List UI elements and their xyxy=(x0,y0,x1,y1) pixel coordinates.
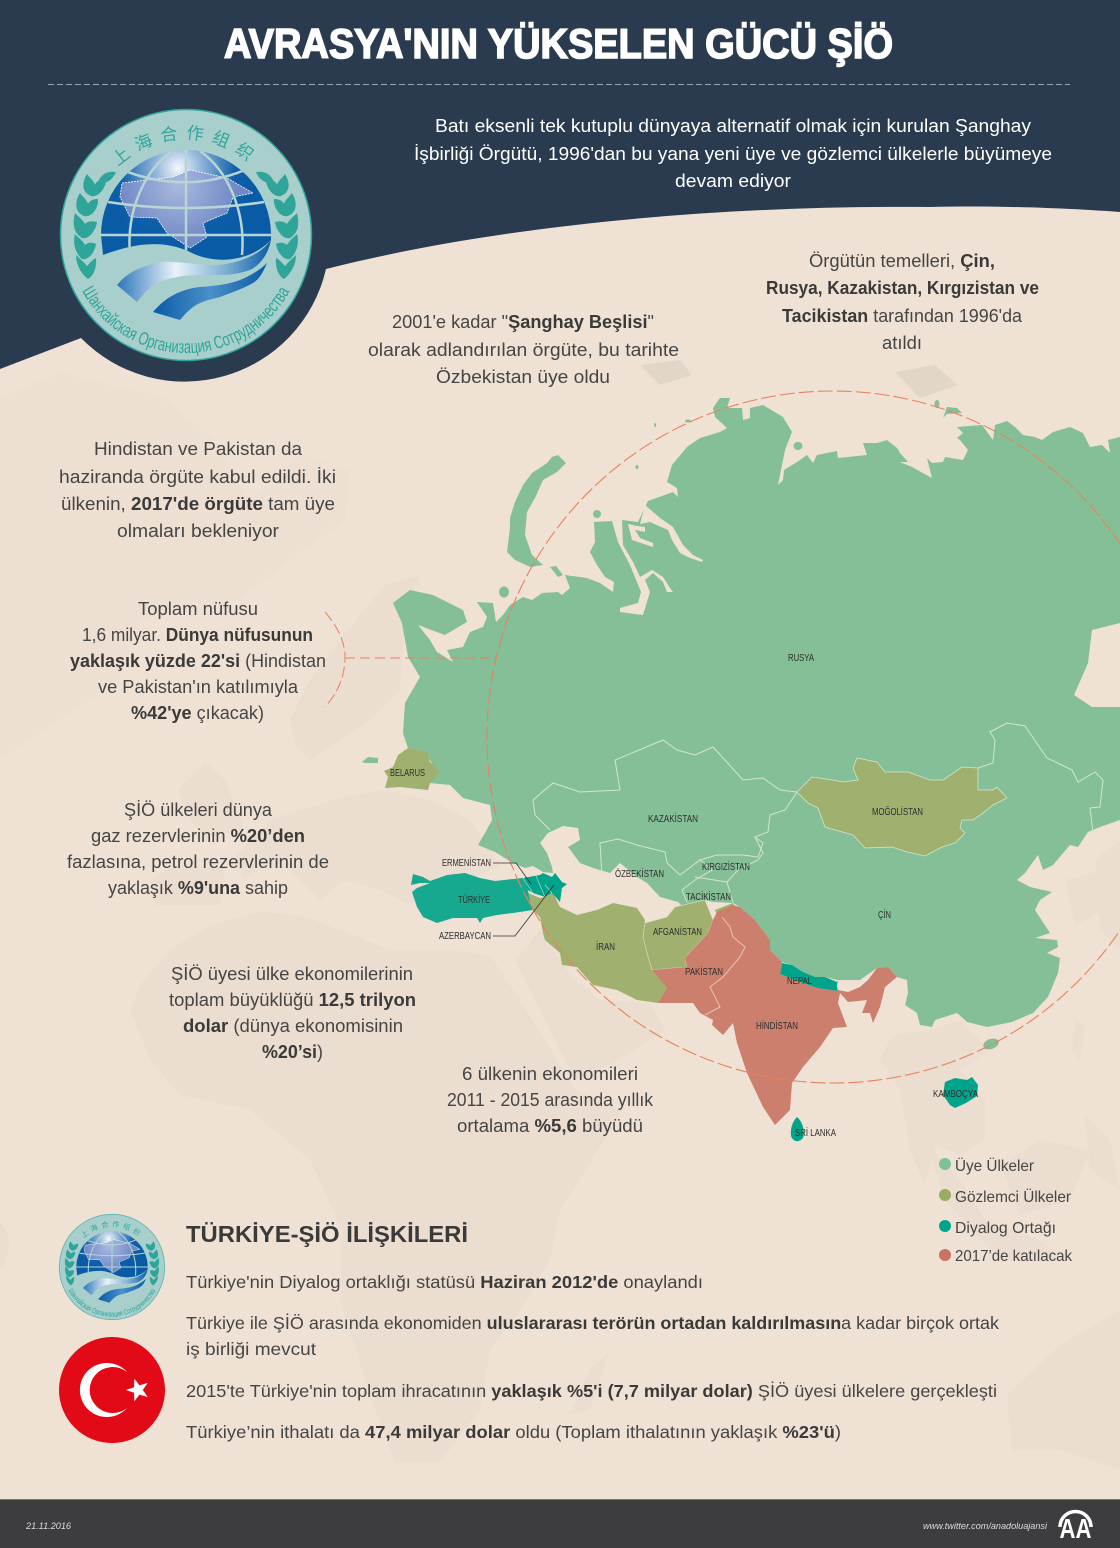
legend xyxy=(939,1157,1073,1265)
small SCO logo: Шанхайская Организация Сотрудничества xyxy=(68,1288,156,1318)
text: economy size: dolar (dünya ekonomisinin xyxy=(183,1016,403,1036)
text: economy size: ŞİÖ üyesi ülke ekonomilerinin xyxy=(171,964,413,984)
intro text: devam ediyor xyxy=(675,171,791,191)
text: Shanghai Five xyxy=(368,312,679,387)
text: economy size: toplam büyüklüğü 12,5 trilyon xyxy=(169,990,416,1010)
map: joining in 2017 xyxy=(652,905,897,1125)
text: energy reserves: fazlasına, petrol rezervlerinin de xyxy=(67,852,329,872)
text: growth: 2011 - 2015 arasında yıllık xyxy=(447,1090,654,1110)
map labels: TÜRKİYE xyxy=(458,893,490,906)
legend: 2017’de katılacak xyxy=(955,1248,1073,1265)
map labels: KIRGIZİSTAN xyxy=(702,860,750,873)
map labels: ERMENİSTAN xyxy=(442,856,491,869)
legend: Üye Ülkeler xyxy=(955,1157,1035,1175)
map labels: İRAN xyxy=(596,940,615,953)
text: India and Pakistan: olmaları bekleniyor xyxy=(117,521,279,541)
intro text: İşbirliği Örgütü, 1996'dan bu yana yeni üye ve gözlemci ülkelerle büyümeye xyxy=(414,144,1052,164)
map labels: RUSYA xyxy=(788,652,814,664)
text: growth: ortalama %5,6 büyüdü xyxy=(457,1116,643,1136)
text: Shanghai Five: Özbekistan üye oldu xyxy=(436,367,610,387)
header band xyxy=(0,0,1120,382)
text: India and Pakistan xyxy=(59,439,336,541)
text: population xyxy=(70,599,326,723)
map labels: KAMBOÇYA xyxy=(933,1088,978,1100)
text: Shanghai Five: olarak adlandırılan örgüte, bu tarihte xyxy=(368,340,679,360)
map labels: KAZAKİSTAN xyxy=(648,812,698,825)
text: Shanghai Five: 2001'e kadar "Şanghay Beşlisi" xyxy=(392,312,654,332)
map labels xyxy=(390,652,978,1139)
Turkey relations text xyxy=(186,1272,999,1442)
map labels: NEPAL xyxy=(787,975,812,987)
icon: Turkish flag xyxy=(59,1337,165,1443)
Turkey relations text: 2015'te Türkiye'nin toplam ihracatının yaklaşık %5'i (7,7 milyar dolar) ŞİÖ üyesi ülkelere gerçekleşti xyxy=(186,1381,997,1401)
heading: Turkey relations: TÜRKİYE-ŞİÖ İLİŞKİLERİ xyxy=(186,1221,468,1247)
map: member countries xyxy=(362,398,1120,1051)
small SCO logo: 上海合作组织 xyxy=(82,1220,141,1238)
text: growth: 6 ülkenin ekonomileri xyxy=(462,1064,638,1084)
footer bar xyxy=(0,1499,1120,1548)
legend: Diyalog Ortağı xyxy=(955,1220,1056,1237)
text: population: %42'ye çıkacak) xyxy=(131,703,264,723)
map labels: MOĞOLİSTAN xyxy=(872,805,923,818)
Turkey relations text: Türkiye'nin Diyalog ortaklığı statüsü Haziran 2012'de onaylandı xyxy=(186,1272,703,1292)
small SCO logo xyxy=(58,1214,166,1320)
text: energy reserves: gaz rezervlerinin %20’den xyxy=(91,826,305,846)
text: India and Pakistan: haziranda örgüte kabul edildi. İki xyxy=(59,467,336,487)
footer url: www.twitter.com/anadoluajansi xyxy=(923,1521,1048,1532)
Turkey relations text: Türkiye ile ŞİÖ arasında ekonomiden uluslararası terörün ortadan kaldırılmasın a kadar birçok ortak xyxy=(186,1313,999,1333)
population callout arc and leader xyxy=(325,612,497,707)
map labels: AZERBAYCAN xyxy=(439,930,491,942)
text: population: yaklaşık yüzde 22'si (Hindistan xyxy=(70,651,326,671)
map labels: ÇİN xyxy=(878,908,891,921)
text: energy reserves xyxy=(67,800,329,898)
text: economy size: %20’si) xyxy=(262,1042,323,1062)
legend: Gözlemci Ülkeler xyxy=(955,1188,1072,1206)
map labels: TACİKİSTAN xyxy=(686,890,731,903)
text: population: Toplam nüfusu xyxy=(138,599,258,619)
Turkey relations text: iş birliği mevcut xyxy=(186,1339,316,1359)
SCO logo xyxy=(60,108,312,362)
map labels: ÖZBEKİSTAN xyxy=(615,867,664,880)
text: founding: Örgütün temelleri, Çin, xyxy=(809,251,995,271)
map: observer countries xyxy=(384,748,1007,1003)
map labels: SRİ LANKA xyxy=(795,1126,836,1139)
text: energy reserves: ŞİÖ ülkeleri dünya xyxy=(124,800,273,820)
faint world map backdrop xyxy=(0,360,1120,1470)
text: population: ve Pakistan'ın katılımıyla xyxy=(98,677,299,697)
SCO logo: Шанхайская Организация Сотрудничества xyxy=(82,285,290,356)
text: growth xyxy=(447,1064,654,1136)
SCO logo: 上海合作组织 xyxy=(115,124,254,166)
title: AVRASYA'NIN YÜKSELEN GÜCÜ ŞİÖ xyxy=(224,20,893,67)
text: founding xyxy=(766,251,1039,353)
map labels: BELARUS xyxy=(390,767,425,779)
text: India and Pakistan: Hindistan ve Pakistan da xyxy=(94,439,303,459)
map labels: AFGANİSTAN xyxy=(653,925,702,938)
footer date: 21.11.2016 xyxy=(25,1521,71,1531)
map labels: HİNDİSTAN xyxy=(756,1019,798,1032)
circle of influence, dashed xyxy=(487,391,1120,1083)
dashed rule xyxy=(48,84,1070,86)
text: economy size xyxy=(169,964,416,1062)
intro text: Batı eksenli tek kutuplu dünyaya alternatif olmak için kurulan Şanghay xyxy=(435,116,1031,136)
text: founding: Tacikistan tarafından 1996'da xyxy=(782,306,1023,326)
text: energy reserves: yaklaşık %9'una sahip xyxy=(108,878,288,898)
Turkey relations text: Türkiye’nin ithalatı da 47,4 milyar dolar oldu (Toplam ithalatının yaklaşık %23'ü) xyxy=(186,1422,841,1442)
map: dialogue partners xyxy=(411,873,978,1141)
text: founding: atıldı xyxy=(882,333,922,353)
text: India and Pakistan: ülkenin, 2017'de örgüte tam üye xyxy=(61,494,335,514)
icon: AA logo: AA xyxy=(1060,1513,1092,1544)
text: founding: Rusya, Kazakistan, Kırgızistan ve xyxy=(766,278,1039,298)
map labels: PAKİSTAN xyxy=(685,965,723,978)
leader lines: Armenia, Azerbaijan xyxy=(493,863,554,936)
text: population: 1,6 milyar. Dünya nüfusunun xyxy=(82,625,313,645)
intro text xyxy=(414,116,1052,191)
